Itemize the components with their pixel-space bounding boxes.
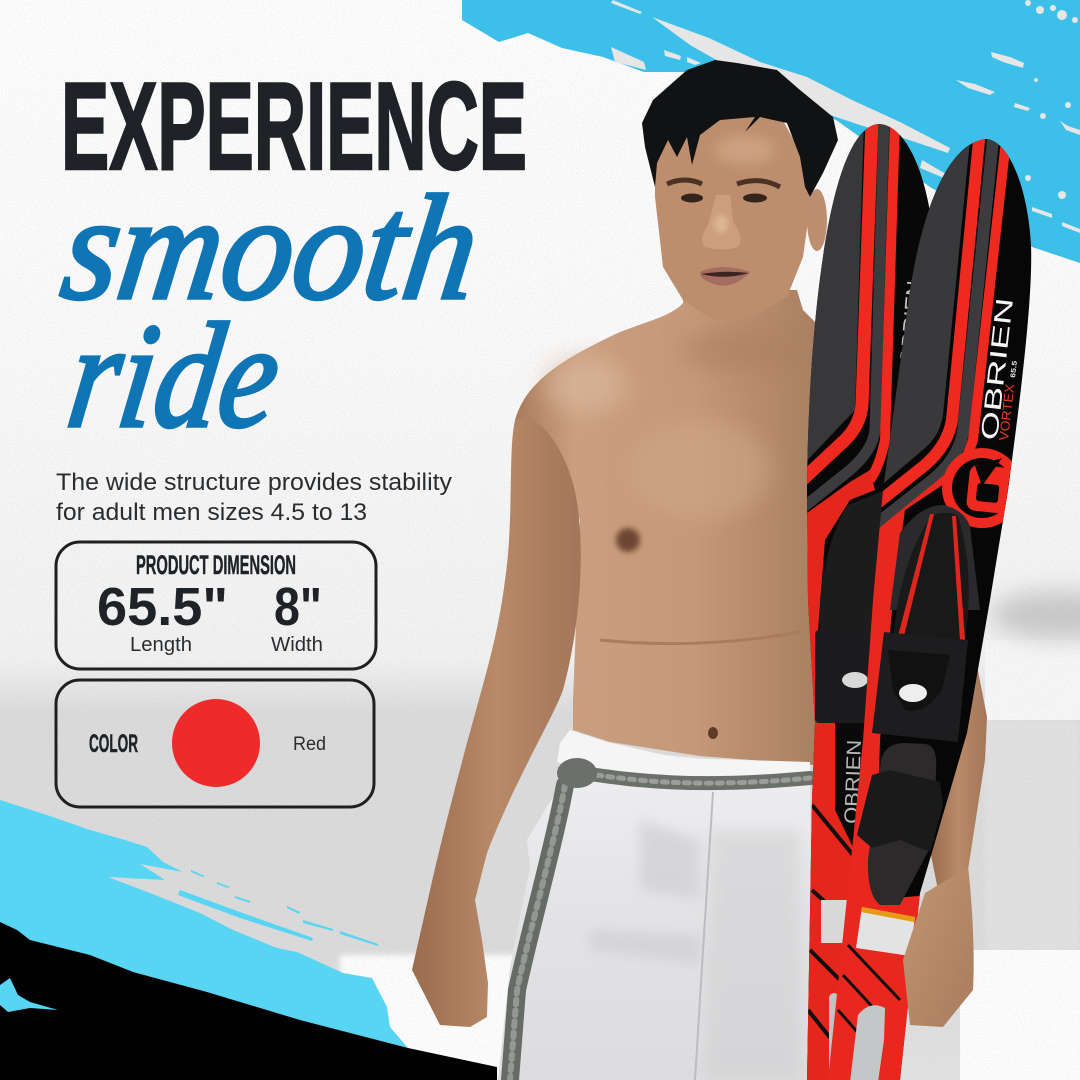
man: trousers	[498, 745, 812, 1080]
front ski: red lower body	[829, 474, 944, 1080]
man: viewer left arm	[412, 418, 581, 1027]
man: viewer right arm	[930, 640, 987, 900]
front ski: binding plate	[872, 632, 968, 742]
front ski: front boot	[893, 513, 969, 640]
front ski: model name: VORTEX	[996, 383, 1017, 441]
label: length: Length	[130, 634, 192, 656]
front ski: stripes	[875, 130, 1006, 525]
front ski: rear toe strap	[868, 743, 936, 905]
man	[412, 60, 987, 1080]
description text	[56, 469, 452, 526]
value: red: Red	[293, 734, 326, 755]
back ski: warning label	[821, 900, 847, 943]
value: width: 8"	[274, 577, 322, 637]
front ski: binding ring	[890, 505, 980, 610]
man: hair	[642, 60, 838, 197]
back ski: red stripes	[800, 120, 895, 510]
front ski: grey deck	[884, 145, 970, 483]
front ski: rear strap	[857, 770, 943, 852]
water ski: back	[807, 124, 930, 1080]
man: chest shading	[545, 330, 800, 739]
brush stroke: top right blue	[462, 0, 1080, 263]
front ski: size: 65.5	[1010, 360, 1019, 378]
back ski: binding badge	[842, 672, 868, 688]
back ski: logo: OBRIEN	[841, 739, 866, 824]
front ski: round logo	[942, 448, 1012, 528]
man: face	[655, 115, 810, 320]
back ski: grey deck	[807, 131, 864, 460]
back ski: fin	[829, 993, 837, 1070]
brush stroke: bottom left blue and black	[0, 800, 497, 1080]
panel: color	[56, 680, 374, 807]
label: color: COLOR	[89, 730, 138, 758]
back ski: boot	[820, 491, 883, 630]
man: waistband	[557, 730, 810, 788]
man: facial features	[667, 136, 780, 286]
script heading: ride: ride	[59, 293, 290, 459]
description text: for adult men sizes 4.5 to 13	[56, 499, 367, 526]
back ski: red lower body	[807, 470, 875, 1080]
panel: product dimension	[56, 542, 376, 669]
swatch: red	[172, 699, 260, 787]
water ski: front	[820, 130, 1040, 1080]
heading: product dimension: PRODUCT DIMENSION	[136, 550, 296, 580]
front ski: heel cup	[888, 650, 950, 711]
back ski: binding plate	[815, 630, 875, 723]
front ski: stripes	[838, 945, 900, 1035]
front ski: binding badge	[899, 684, 927, 702]
description text: The wide structure provides stability	[56, 469, 452, 496]
front ski: warning label	[856, 907, 915, 956]
back ski: OBRIEN top: OBRIEN	[895, 280, 927, 365]
title: EXPERIENCE	[61, 58, 527, 196]
man: ear	[807, 189, 827, 251]
value: length: 65.5"	[97, 577, 228, 637]
man: neck and torso	[515, 290, 815, 765]
man: rope belt	[510, 758, 810, 1080]
back ski: black centre strip	[835, 723, 858, 846]
label: width: Width	[271, 634, 323, 656]
script heading: smooth: smooth	[53, 165, 489, 331]
man: hand	[903, 867, 974, 1027]
front ski: brand name: OBRIEN	[976, 297, 1019, 442]
back ski: stripes	[808, 804, 852, 1040]
man: trouser folds	[590, 792, 800, 1080]
front ski: fin	[850, 1005, 885, 1080]
